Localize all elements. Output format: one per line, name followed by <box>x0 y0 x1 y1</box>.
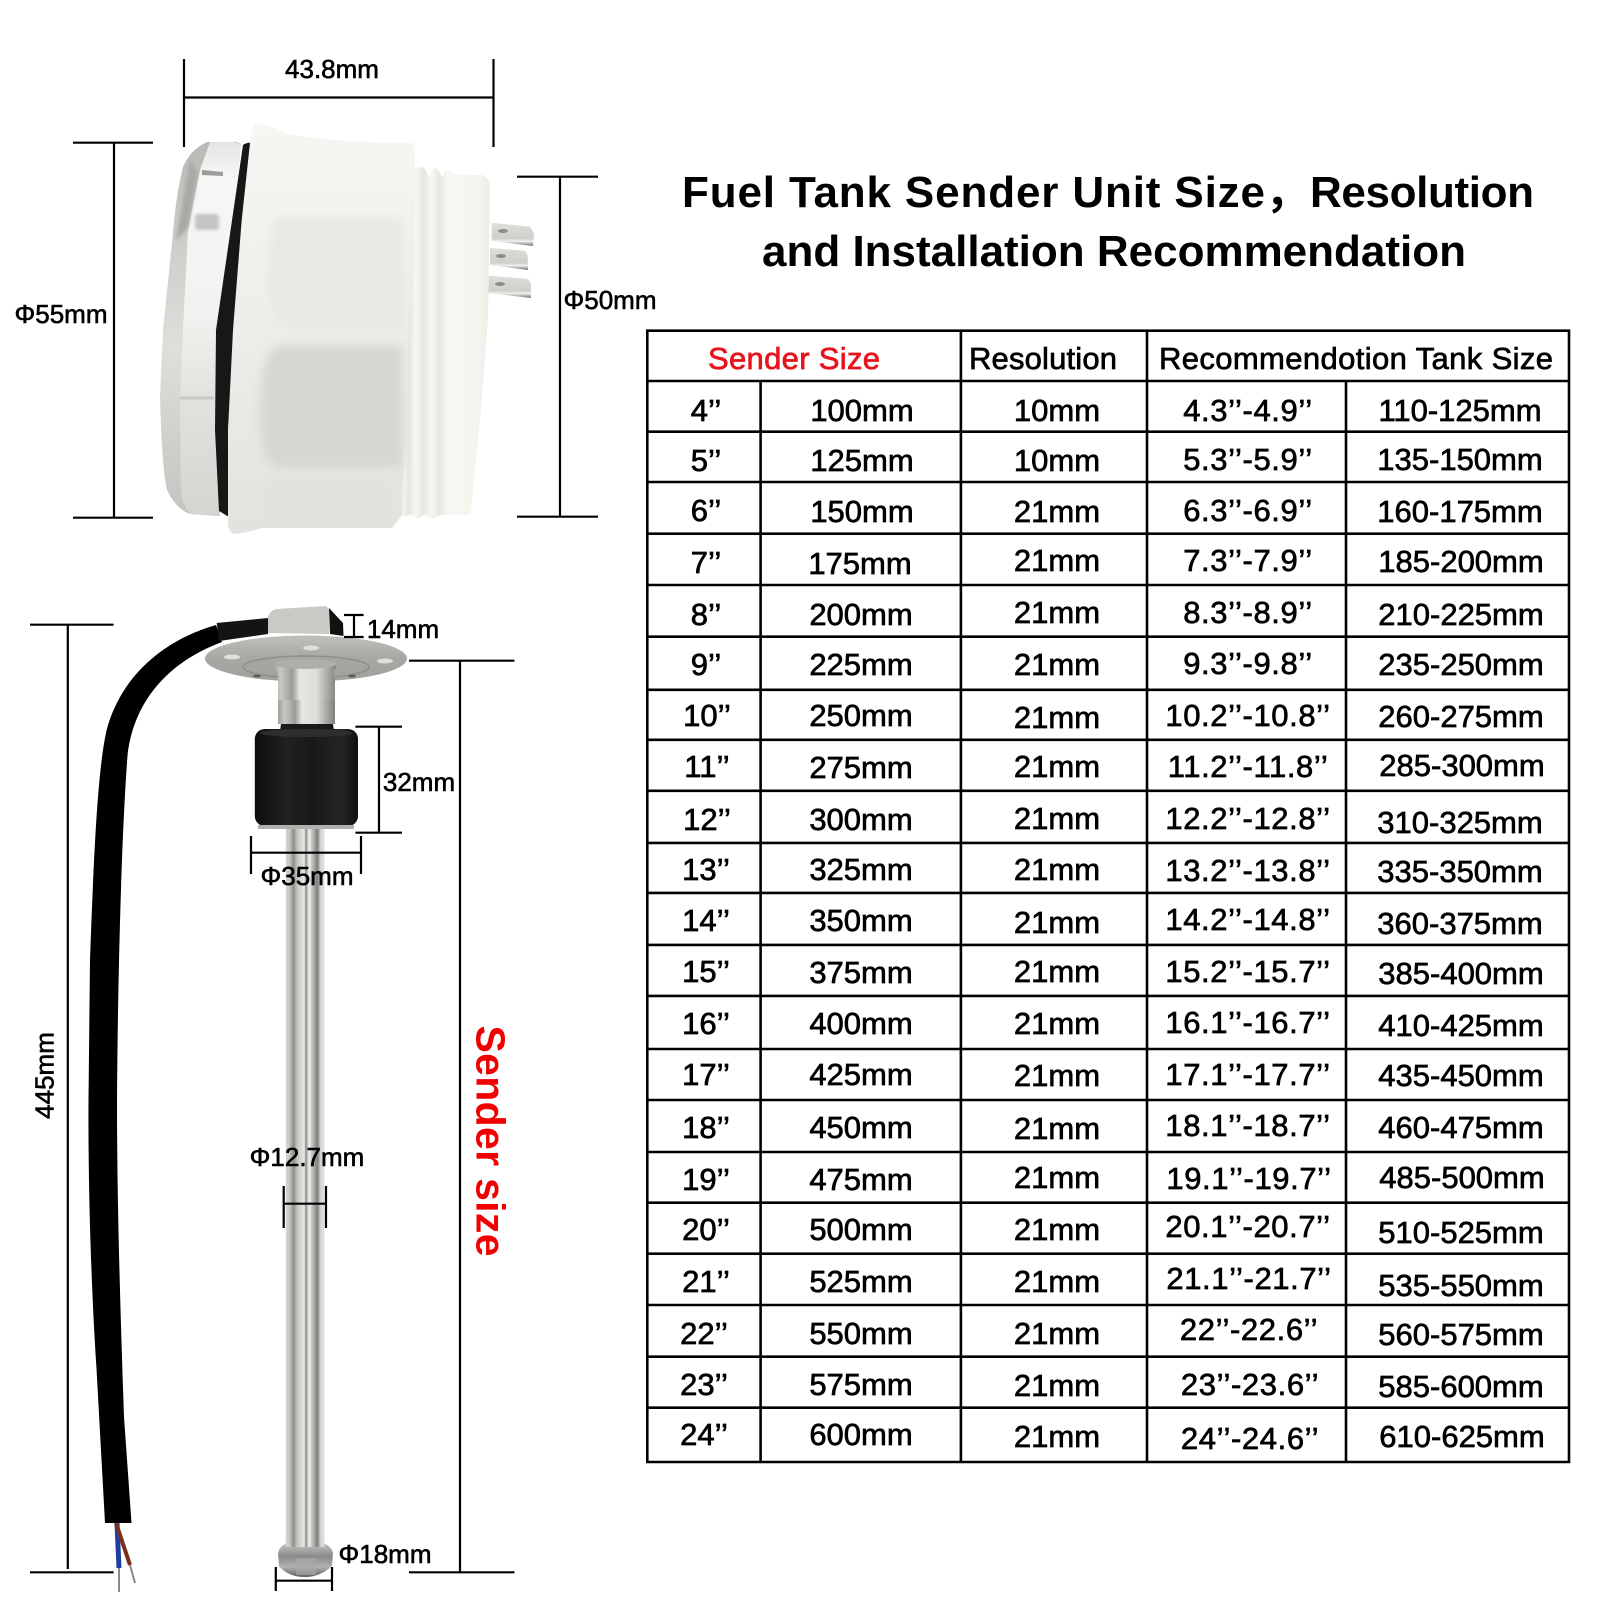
row 15 inch: 375mm <box>809 955 913 990</box>
gauge glass edge <box>160 142 241 516</box>
row 12 inch: 12’’ <box>683 802 731 837</box>
row 23 inch: 585-600mm <box>1378 1369 1544 1404</box>
row 13 inch: 13.2’’-13.8’’ <box>1165 853 1331 888</box>
row 14 inch: 350mm <box>809 903 913 938</box>
title: ， <box>1265 168 1309 217</box>
row 13 inch: 13’’ <box>682 852 730 887</box>
row 13 inch: 325mm <box>809 852 913 887</box>
row 4 inch: 110-125mm <box>1378 393 1542 428</box>
row 14 inch: 360-375mm <box>1377 906 1543 941</box>
row 23 inch: 575mm <box>809 1367 913 1402</box>
row 20 inch: 20’’ <box>682 1212 730 1247</box>
row 11 inch: 285-300mm <box>1379 748 1545 783</box>
neck tube <box>278 678 335 724</box>
row 10 inch: 250mm <box>809 698 913 733</box>
row 24 inch: 21mm <box>1014 1419 1100 1454</box>
terminal 3 <box>488 276 531 298</box>
chrome bezel ring <box>180 142 241 515</box>
dimension: sender size: Sender size <box>468 1026 514 1256</box>
title <box>682 168 1534 276</box>
row 11 inch: 11’’ <box>684 749 730 784</box>
row 21 inch: 535-550mm <box>1378 1268 1544 1303</box>
row 23 inch <box>680 1367 1544 1404</box>
row 23 inch: 21mm <box>1014 1368 1100 1403</box>
row 5 inch: 125mm <box>810 443 914 478</box>
row 12 inch: 21mm <box>1014 801 1100 836</box>
row 6 inch: 160-175mm <box>1377 494 1543 529</box>
row 20 inch: 20.1’’-20.7’’ <box>1165 1209 1331 1244</box>
title: and Installation Recommendation <box>762 227 1466 276</box>
row 4 inch <box>691 393 1542 428</box>
row 7 inch <box>691 543 1544 581</box>
dimension: 14mm head height: 14mm <box>367 614 439 644</box>
row 10 inch: 260-275mm <box>1378 699 1544 734</box>
row 4 inch: 4.3’’-4.9’’ <box>1183 393 1313 428</box>
row 12 inch: 12.2’’-12.8’’ <box>1165 801 1331 836</box>
terminal 1 <box>492 223 534 246</box>
float <box>255 724 358 829</box>
row 19 inch: 475mm <box>809 1162 913 1197</box>
row 16 inch: 21mm <box>1014 1006 1100 1041</box>
row 16 inch: 16.1’’-16.7’’ <box>1165 1005 1331 1040</box>
row 9 inch: 9’’ <box>691 647 721 682</box>
mounting flange <box>205 636 407 700</box>
row 18 inch: 460-475mm <box>1378 1110 1544 1145</box>
row 13 inch: 335-350mm <box>1377 854 1543 889</box>
row 9 inch: 9.3’’-9.8’’ <box>1183 646 1313 681</box>
row 4 inch: 10mm <box>1014 393 1100 428</box>
row 8 inch: 21mm <box>1014 595 1100 630</box>
row 21 inch: 21.1’’-21.7’’ <box>1166 1261 1332 1296</box>
row 6 inch: 6.3’’-6.9’’ <box>1183 493 1313 528</box>
dimension: 32mm float height: 32mm <box>383 767 455 797</box>
row 18 inch: 21mm <box>1014 1111 1100 1146</box>
row 16 inch <box>682 1005 1544 1043</box>
row 12 inch: 300mm <box>809 802 913 837</box>
row 24 inch: 24’’-24.6’’ <box>1181 1421 1319 1456</box>
row 21 inch: 21’’ <box>682 1264 730 1299</box>
dimension: diameter 35mm float <box>251 836 361 891</box>
row 13 inch: 21mm <box>1014 852 1100 887</box>
row 20 inch <box>682 1209 1544 1250</box>
row 8 inch: 200mm <box>809 597 913 632</box>
bezel highlights <box>176 160 223 398</box>
dimension: diameter 55mm: Φ55mm <box>15 299 107 329</box>
row 5 inch: 135-150mm <box>1377 442 1543 477</box>
black cable <box>88 625 222 1523</box>
dimension: diameter 55mm <box>15 143 153 518</box>
row 7 inch: 21mm <box>1014 543 1100 578</box>
row 17 inch: 435-450mm <box>1378 1058 1544 1093</box>
row 7 inch: 7.3’’-7.9’’ <box>1183 543 1313 578</box>
row 16 inch: 410-425mm <box>1378 1008 1544 1043</box>
row 17 inch: 425mm <box>809 1057 913 1092</box>
dimension: diameter 18mm end cap <box>276 1539 431 1591</box>
row 11 inch: 11.2’’-11.8’’ <box>1168 749 1328 784</box>
row 19 inch: 485-500mm <box>1379 1160 1545 1195</box>
row 14 inch: 14.2’’-14.8’’ <box>1165 902 1331 937</box>
dimension: 32mm float height <box>355 727 455 833</box>
dimension: sender size <box>409 661 514 1572</box>
row 22 inch: 550mm <box>809 1316 913 1351</box>
row 9 inch: 225mm <box>809 647 913 682</box>
row 10 inch: 10.2’’-10.8’’ <box>1165 698 1331 733</box>
row 21 inch: 525mm <box>809 1264 913 1299</box>
row 12 inch: 310-325mm <box>1377 805 1543 840</box>
dimension: diameter 12.7mm rod: Φ12.7mm <box>250 1142 364 1172</box>
row 20 inch: 21mm <box>1014 1212 1100 1247</box>
row 17 inch: 21mm <box>1014 1058 1100 1093</box>
dimension: 43.8mm: 43.8mm <box>285 54 379 84</box>
row 9 inch <box>691 646 1544 682</box>
table grid <box>647 331 1569 1462</box>
wire ends <box>116 1523 135 1592</box>
table header row: Resolution <box>969 341 1117 376</box>
row 18 inch: 18.1’’-18.7’’ <box>1165 1108 1331 1143</box>
row 21 inch: 21mm <box>1014 1264 1100 1299</box>
row 23 inch: 23’’-23.6’’ <box>1181 1367 1319 1402</box>
threaded collar <box>402 167 490 519</box>
row 17 inch <box>682 1057 1544 1093</box>
row 22 inch: 22’’-22.6’’ <box>1180 1312 1318 1347</box>
row 15 inch: 21mm <box>1014 954 1100 989</box>
dimension: 43.8mm <box>184 54 494 147</box>
row 10 inch: 21mm <box>1014 700 1100 735</box>
row 4 inch: 100mm <box>810 393 914 428</box>
rod end cap <box>278 1538 333 1577</box>
row 9 inch: 21mm <box>1014 647 1100 682</box>
row 8 inch: 210-225mm <box>1378 597 1544 632</box>
row 8 inch: 8.3’’-8.9’’ <box>1183 595 1313 630</box>
row 23 inch: 23’’ <box>680 1367 728 1402</box>
row 6 inch <box>691 493 1543 529</box>
row 14 inch: 21mm <box>1014 905 1100 940</box>
row 14 inch <box>682 902 1543 941</box>
row 10 inch: 10’’ <box>683 698 731 733</box>
panel: gauge photo with dimensions <box>15 54 656 534</box>
row 15 inch <box>682 954 1544 991</box>
housing shaded middle panel <box>260 345 402 468</box>
row 22 inch: 21mm <box>1014 1316 1100 1351</box>
housing shaded lower panel <box>260 478 394 520</box>
row 12 inch <box>683 801 1543 840</box>
dimension: diameter 35mm float: Φ35mm <box>261 861 353 891</box>
dimension: diameter 50mm <box>517 177 656 517</box>
table header row: Sender Size <box>708 341 880 376</box>
terminal 2 <box>490 248 528 270</box>
gauge body photo <box>160 123 534 534</box>
row 24 inch: 610-625mm <box>1379 1419 1545 1454</box>
white housing <box>228 123 415 534</box>
row 15 inch: 385-400mm <box>1378 956 1544 991</box>
dimension: diameter 12.7mm rod <box>250 1142 364 1228</box>
row 4 inch: 4’’ <box>691 393 721 428</box>
row 5 inch: 5’’ <box>691 443 721 478</box>
row 9 inch: 235-250mm <box>1378 647 1544 682</box>
row 22 inch <box>680 1312 1544 1352</box>
row 11 inch: 21mm <box>1014 749 1100 784</box>
dimension: 445mm overall <box>30 625 114 1572</box>
panel: sender probe photo with dimensions <box>30 606 514 1592</box>
row 19 inch: 19.1’’-19.7’’ <box>1166 1161 1332 1196</box>
spade terminals <box>488 223 534 298</box>
row 7 inch: 185-200mm <box>1378 544 1544 579</box>
row 22 inch: 22’’ <box>680 1316 728 1351</box>
dimension: diameter 18mm end cap: Φ18mm <box>339 1539 431 1569</box>
row 15 inch: 15’’ <box>682 954 730 989</box>
row 19 inch: 19’’ <box>682 1162 730 1197</box>
row 20 inch: 500mm <box>809 1212 913 1247</box>
row 24 inch: 600mm <box>809 1417 913 1452</box>
row 13 inch <box>682 852 1543 889</box>
row 15 inch: 15.2’’-15.7’’ <box>1165 954 1331 989</box>
row 14 inch: 14’’ <box>682 903 730 938</box>
row 5 inch <box>691 442 1543 478</box>
dimension: 445mm overall: 445mm <box>30 1032 60 1119</box>
title: Fuel Tank Sender Unit Size <box>682 168 1265 217</box>
steel rod <box>286 825 324 1550</box>
housing shaded upper panel <box>268 218 404 330</box>
row 18 inch <box>682 1108 1544 1146</box>
row 16 inch: 400mm <box>809 1006 913 1041</box>
row 5 inch: 5.3’’-5.9’’ <box>1183 442 1313 477</box>
row 19 inch: 21mm <box>1014 1160 1100 1195</box>
row 24 inch: 24’’ <box>680 1417 728 1452</box>
table header row: Recommendotion Tank Size <box>1159 341 1553 376</box>
row 8 inch <box>691 595 1544 632</box>
row 24 inch <box>680 1417 1545 1456</box>
row 20 inch: 510-525mm <box>1378 1215 1544 1250</box>
table: sender size, resolution, recommended tank size <box>647 331 1569 1462</box>
dimension: diameter 50mm: Φ50mm <box>564 285 656 315</box>
table header row <box>708 341 1553 376</box>
row 18 inch: 450mm <box>809 1110 913 1145</box>
row 6 inch: 21mm <box>1014 494 1100 529</box>
row 6 inch: 6’’ <box>691 493 721 528</box>
row 11 inch: 275mm <box>809 750 913 785</box>
row 10 inch <box>683 698 1544 735</box>
row 17 inch: 17’’ <box>682 1057 730 1092</box>
row 18 inch: 18’’ <box>682 1110 730 1145</box>
row 22 inch: 560-575mm <box>1378 1317 1544 1352</box>
row 17 inch: 17.1’’-17.7’’ <box>1165 1057 1331 1092</box>
row 7 inch: 7’’ <box>691 545 721 580</box>
row 19 inch <box>682 1160 1545 1197</box>
row 21 inch <box>682 1261 1544 1303</box>
row 7 inch: 175mm <box>808 546 912 581</box>
row 5 inch: 10mm <box>1014 443 1100 478</box>
title: Resolution <box>1310 168 1534 217</box>
row 16 inch: 16’’ <box>682 1006 730 1041</box>
rubber o-ring <box>215 143 252 517</box>
row 11 inch <box>684 748 1545 785</box>
cable sleeve and sensor head <box>217 606 344 641</box>
row 6 inch: 150mm <box>810 494 914 529</box>
row 8 inch: 8’’ <box>691 597 721 632</box>
